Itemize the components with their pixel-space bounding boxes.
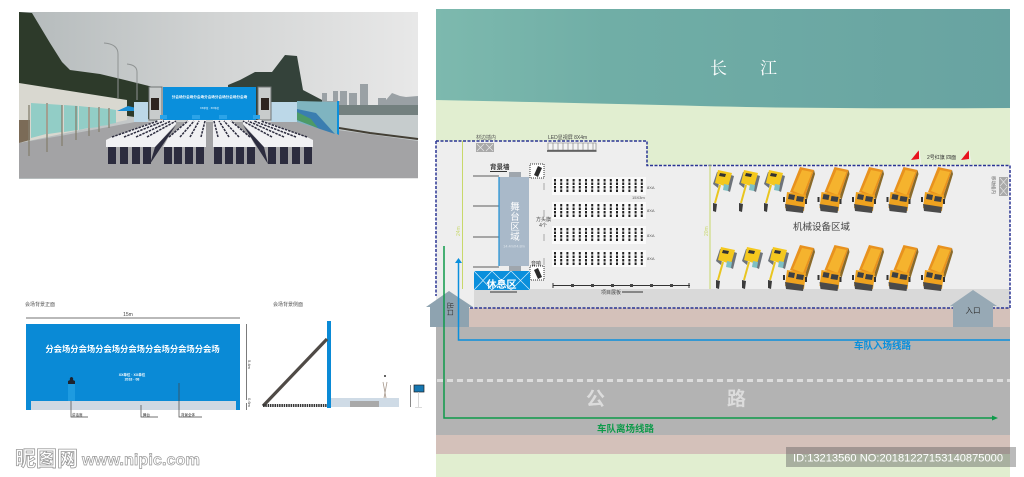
dump trucks top row [783,167,953,213]
blue backdrop [26,324,240,410]
project display label: 项目展板 [601,289,621,296]
podium [68,384,75,401]
stage area: 14.4mX4.8m [503,244,525,248]
speakers [151,98,269,110]
land background [436,90,1010,477]
river [339,115,418,141]
heading: elevation side view: 会场背景侧面 [273,301,303,308]
watermark: nipic logo: www.nipic.com [81,452,200,469]
LED screen plan [547,134,596,151]
backdrop title: 分会场分会场分会场分会场分会场分会场分会场 [172,94,248,99]
excavators bottom row [716,247,789,289]
truss speaker bottom: 音响 [531,260,541,267]
site ground [436,141,1010,308]
seat block 3 [552,226,646,244]
panel: venue perspective rendering [19,12,418,179]
seat block 1 [552,177,646,195]
side panels [134,102,298,122]
stage area [499,177,529,266]
wall base [19,120,30,143]
board stands [29,103,109,156]
city buildings [322,84,418,106]
hillside trees [19,12,155,120]
dimension: 24m: 24m [456,226,462,236]
dimension: backdrop height: 5.4m [247,360,252,370]
tree line behind the stage [228,55,322,120]
dimension: 15m: 15m [123,312,133,318]
sign stand [410,385,424,408]
heading: elevation front view: 会场背景正面 [25,301,55,308]
stage area: 台 [510,211,520,223]
exit gate: 出口 [446,302,455,316]
speaker figure [68,377,75,384]
stage backdrop [163,87,256,120]
far riverbank [339,105,418,116]
excavators top row [713,170,785,212]
panel: front elevation backdrop [26,324,240,417]
red flags [911,150,971,165]
truss speaker bottom [530,260,544,280]
callout: stage: 舞台 [143,412,150,417]
LED screen [297,101,337,134]
entry gate: 入口 [966,306,980,315]
entry route label: 车队入场线路 [854,340,912,352]
display strip [474,289,1010,308]
seat row labels: 8XA [647,208,655,213]
small stage signs [160,115,260,119]
road [436,327,1010,435]
callout: backdrop: 背景全体 [181,412,195,417]
audience white shirts [106,120,313,147]
backdrop subtitle: XX单位 · XX单位 [119,372,146,377]
equipment area label: 机械设备区域 [793,221,851,233]
panel: side elevation [263,321,424,408]
project display label [601,289,643,296]
callout: backdrop [179,383,202,417]
podium speaker head [384,375,386,377]
stage platform [331,398,399,407]
LED screen edge [337,101,339,135]
banner markers [543,183,545,265]
entry gate [950,290,997,327]
teal display boards [31,103,116,138]
backdrop subtitle: XX单位 · XX单位 [200,106,219,110]
pink verge top [469,308,1010,327]
panel: site plan [426,9,1010,477]
backdrop wall label: 背景墙 [490,162,510,171]
ground [19,122,418,178]
seat row labels: 8XA [647,233,655,238]
seat block 4 [552,250,646,267]
project display rail [553,283,690,288]
river shore [339,128,418,139]
entry route line [455,258,1010,340]
seating blocks [552,177,646,267]
dump trucks bottom row [783,245,953,291]
stage area: 区 [510,222,520,233]
dimension: 20m: 20m [704,226,710,236]
callout: podium: 讲话席 [72,412,83,417]
callout: podium [71,401,88,417]
flag banner label: 方头旗 [536,216,551,223]
watermark: nipic logo [15,448,200,471]
dimension: 20m [704,165,710,289]
exit route label: 车队离场线路 [597,423,655,435]
rest area [474,271,530,292]
exit route line [444,246,998,420]
wall supports [473,176,499,267]
material box left: 材边插内 [476,134,496,141]
stage step [350,401,379,407]
seat row labels: 15X3m [632,195,645,200]
LED screen greenery [297,112,318,128]
red flags: 2号红旗 四面 [927,154,956,161]
river label second character: 江 [760,54,777,79]
LED screen scene [297,109,335,134]
watermark: nipic logo: 昵图网 [15,448,78,471]
dimension: backdrop height [246,324,252,410]
seat block 2 [552,202,646,219]
street lamps [104,43,137,100]
flag banner count: 4个 [539,223,547,229]
material box right [990,176,1008,196]
stage steps [509,172,521,272]
stage strip [31,401,236,410]
road label left: 公 [586,389,605,410]
LED screen plan: LED显视屏 8X4m [548,134,587,141]
truss speaker top [530,164,544,178]
retaining wall [19,83,127,143]
pink verge bottom [436,435,1010,454]
podium stand [383,382,387,398]
road centre dashes [437,379,1010,382]
seat row labels: 8XA [647,256,655,261]
truss towers [149,87,271,120]
seat row labels: 8XA [647,185,655,190]
seat row labels [632,185,655,261]
dashed site boundary [436,141,1010,308]
backdrop date: 2018 · 08 [125,378,139,382]
material box left [476,134,496,152]
audience legs [112,147,308,164]
dimension: backdrop height: 0.6m [247,398,252,408]
watermark: image ID bar: ID:13213560 NO:20181227153140875000 [793,452,1003,464]
river label: 长 [710,54,727,79]
photo sky [19,12,418,179]
watermark: image ID bar [786,447,1016,467]
callout: stage [141,405,158,417]
material box right: 移动插内 [990,176,997,194]
audience inner rows [150,125,268,164]
rest area: 休息区 [486,278,516,291]
base truss [263,404,327,407]
backdrop side bar [327,321,331,408]
stage area: 域 [510,231,520,243]
road label right: 路 [727,388,746,410]
backdrop title text: 分会场分会场分会场分会场分会场分会场分会场 [45,344,220,354]
blue tents [117,106,149,111]
audience head rows [112,121,307,137]
stage area: 舞 [510,202,520,213]
exit gate [426,291,473,327]
diagonal truss [263,339,327,406]
river Yangtze [436,9,1010,108]
